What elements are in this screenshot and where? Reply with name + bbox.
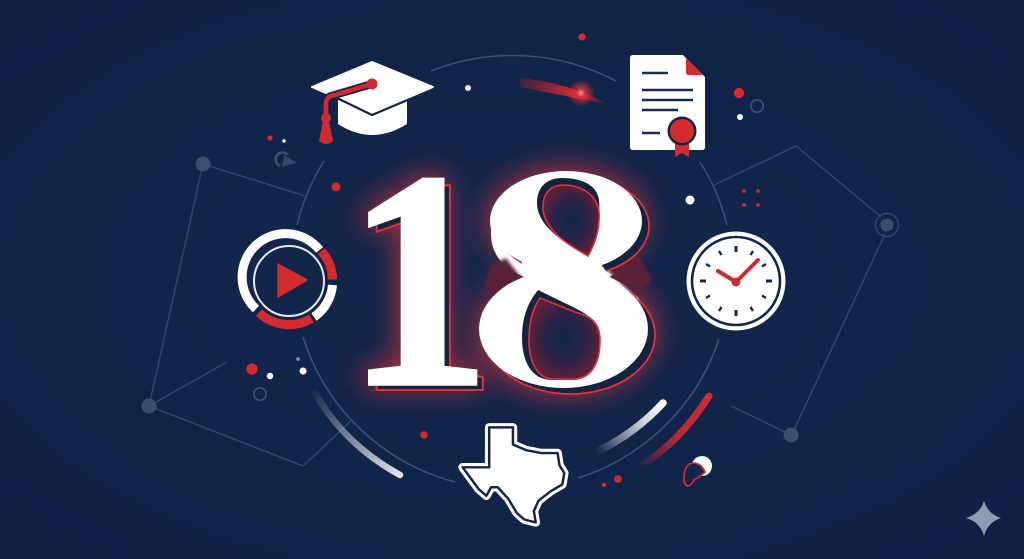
right network lines — [714, 146, 898, 442]
glow behind 18 — [346, 107, 656, 451]
icon: clock — [686, 232, 786, 330]
lower counter of the 8 — [522, 290, 600, 380]
offset outline of the 8 — [486, 176, 655, 394]
decorative dots — [246, 33, 763, 487]
icon: four point star — [966, 501, 1001, 536]
left network node bottom — [142, 398, 156, 414]
icon: graduation cap — [312, 62, 433, 144]
right network node bottom — [784, 428, 798, 442]
comet streak white left — [315, 393, 400, 475]
icon: video play ring — [242, 234, 332, 325]
number 18: 8 — [475, 115, 658, 446]
number 18 — [346, 107, 658, 451]
icon: swirl — [276, 153, 297, 167]
comet streak red right — [638, 396, 709, 468]
upper counter of the 8 — [537, 178, 599, 256]
icon: diploma document — [630, 55, 705, 157]
number 18: 1 — [346, 107, 491, 451]
left waist notch of the 8 — [485, 258, 528, 304]
icon: Texas outline — [463, 427, 564, 522]
left network lines — [142, 156, 352, 466]
number 1 offset red outline: 1 — [354, 113, 498, 457]
right network ring node — [876, 214, 898, 236]
comet streak white right — [600, 403, 663, 450]
orbit ring segments — [297, 55, 727, 482]
right waist notch of the 8 — [600, 252, 652, 298]
white body of the 8 — [479, 171, 648, 388]
red comet with spark — [520, 78, 607, 107]
glow behind 18: 1 — [346, 107, 491, 451]
icon: blob — [684, 456, 712, 486]
left network node top — [196, 156, 210, 172]
